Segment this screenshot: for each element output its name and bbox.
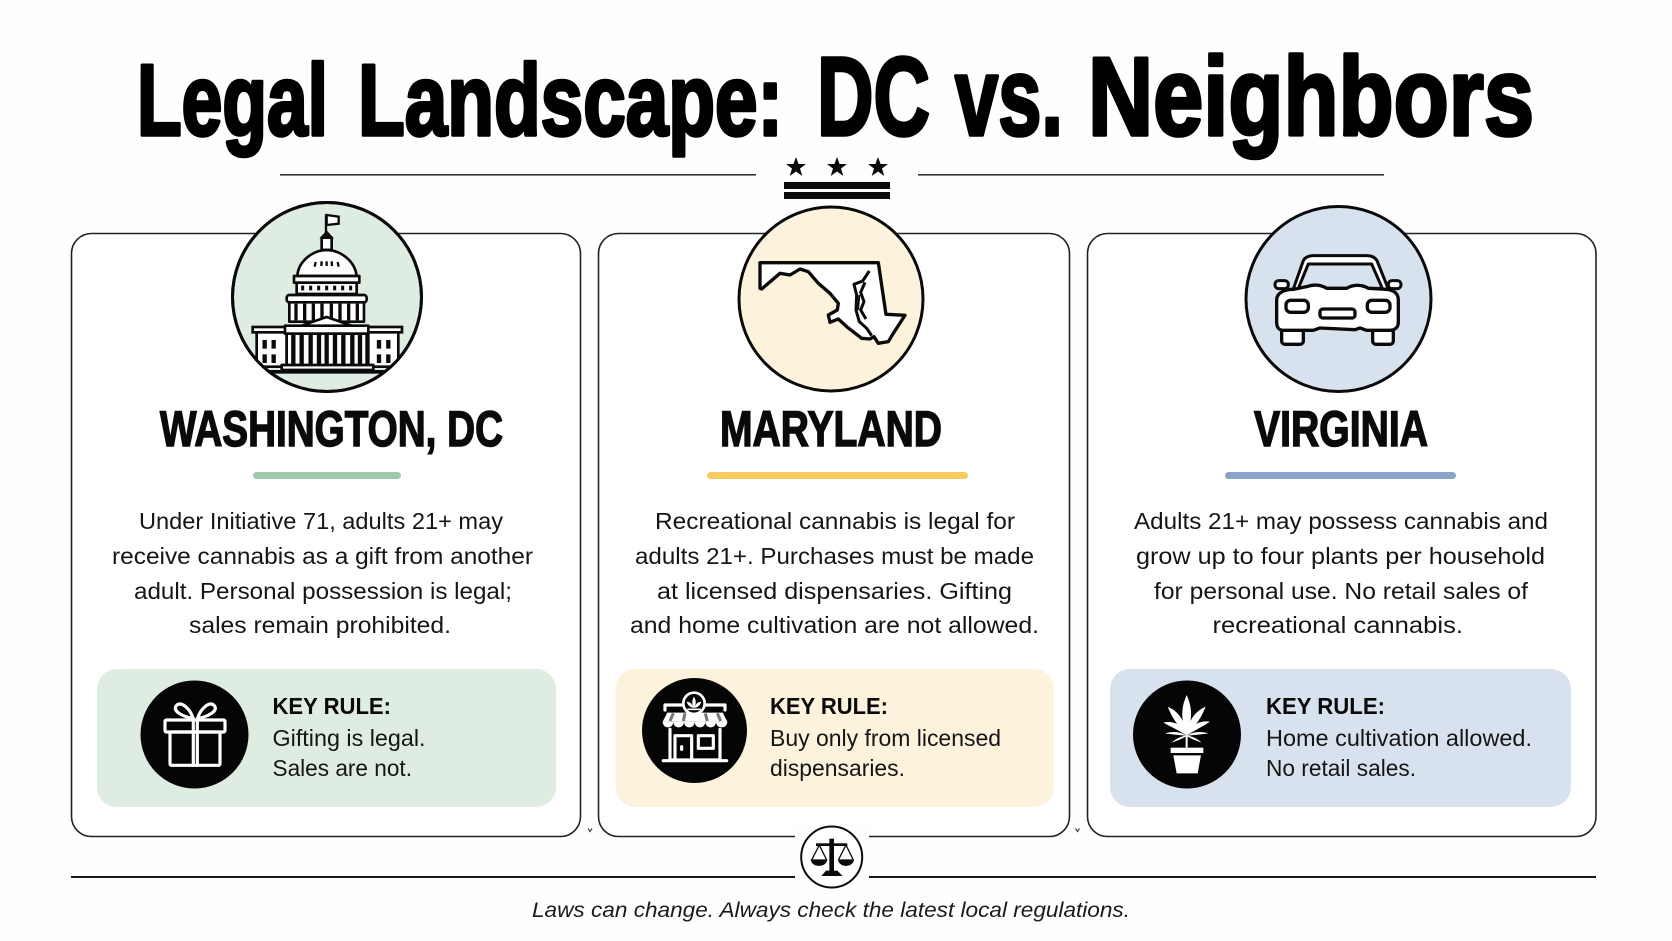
icon: gift	[140, 680, 248, 788]
title: vs.	[955, 35, 1063, 159]
key rule text: KEY RULE:	[770, 693, 888, 719]
text: Washington, DC summary	[112, 508, 533, 638]
title: Landscape:	[358, 45, 783, 157]
text: Maryland summary: at licensed dispensaries. Gifting	[657, 578, 1012, 604]
panel: Washington, DC	[72, 202, 580, 836]
key rule text: KEY RULE:	[272, 693, 391, 719]
accent bar: blue	[1225, 472, 1456, 479]
text: Virginia summary	[1134, 508, 1548, 638]
callout: Washington, DC key rule	[97, 669, 556, 807]
key rule text: No retail sales.	[1266, 755, 1416, 781]
icon: Maryland state outline	[739, 207, 923, 391]
text: Washington, DC summary: adult. Personal possession is legal;	[134, 578, 512, 604]
key rule text: Sales are not.	[272, 755, 412, 781]
callout: Virginia key rule	[1110, 669, 1571, 807]
footer divider	[71, 820, 1596, 890]
key rule text: Home cultivation allowed.	[1266, 725, 1532, 751]
heading: Maryland: MARYLAND	[720, 401, 942, 457]
header divider with DC flag emblem	[280, 157, 1384, 199]
key rule text: Buy only from licensed	[770, 725, 1001, 751]
key rule text	[770, 693, 1001, 781]
accent bar: yellow	[707, 472, 968, 479]
title: DC	[817, 35, 930, 159]
icon: car	[1246, 206, 1431, 392]
card outline: Washington, DC	[72, 234, 580, 836]
key rule text: Gifting is legal.	[272, 725, 426, 751]
card outline: Maryland	[598, 234, 1070, 836]
text: Maryland summary: adults 21+. Purchases must be made	[635, 543, 1034, 569]
card outline: Virginia	[1088, 234, 1596, 836]
callout: Maryland key rule	[616, 669, 1054, 807]
text: Washington, DC summary: Under Initiative 71, adults 21+ may	[139, 508, 503, 534]
heading: Virginia: VIRGINIA	[1254, 401, 1428, 457]
title: Neighbors	[1088, 35, 1534, 159]
text: Virginia summary: recreational cannabis.	[1212, 612, 1463, 638]
footnote: Laws can change. Always check the latest local regulations.	[532, 899, 1130, 922]
key rule text	[1266, 693, 1532, 781]
panel: Maryland	[598, 207, 1070, 836]
text: Washington, DC summary: sales remain prohibited.	[189, 612, 451, 638]
accent bar: green	[253, 472, 401, 479]
text: Virginia summary: Adults 21+ may possess cannabis and	[1134, 508, 1548, 534]
icon: capitol building	[232, 202, 422, 392]
text: Maryland summary	[630, 508, 1039, 638]
icon: dispensary storefront	[642, 678, 747, 783]
title: Legal	[137, 45, 328, 157]
text: Virginia summary: grow up to four plants per household	[1136, 543, 1545, 569]
text: Washington, DC summary: receive cannabis as a gift from another	[112, 543, 533, 569]
heading: Washington, DC: WASHINGTON, DC	[160, 401, 503, 457]
key rule text	[272, 693, 426, 781]
text: Maryland summary: Recreational cannabis is legal for	[655, 508, 1015, 534]
panel: Virginia	[1088, 206, 1596, 836]
text: Virginia summary: for personal use. No retail sales of	[1154, 578, 1528, 604]
key rule text: KEY RULE:	[1266, 693, 1385, 719]
icon: scales of justice	[801, 826, 862, 888]
icon: potted cannabis plant	[1133, 680, 1241, 788]
text: Maryland summary: and home cultivation are not allowed.	[630, 612, 1039, 638]
small caret marks between cards	[588, 828, 1080, 832]
title	[137, 35, 1534, 159]
key rule text: dispensaries.	[770, 755, 905, 781]
